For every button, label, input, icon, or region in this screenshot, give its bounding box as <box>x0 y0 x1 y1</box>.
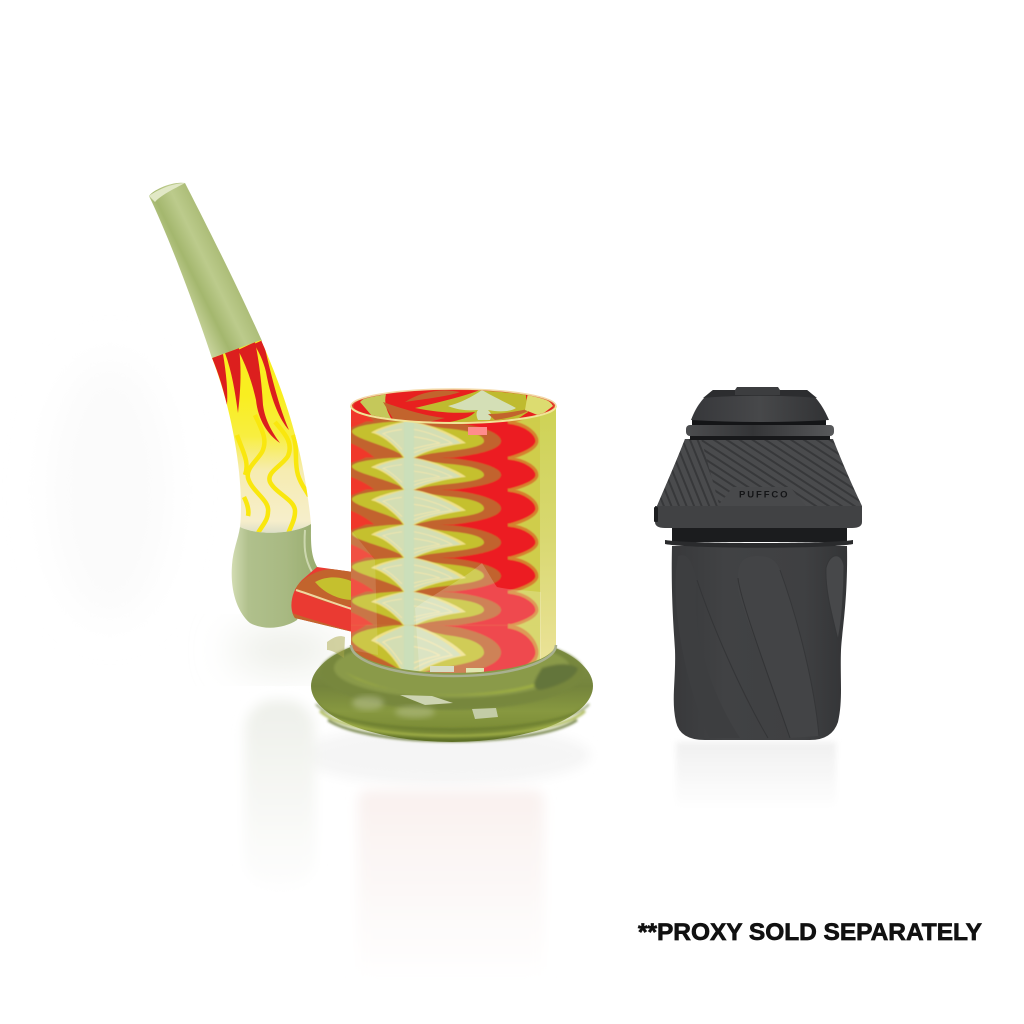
yellow flame waves <box>237 415 309 534</box>
bottom glass edge of cup <box>351 645 556 676</box>
wig-wag cup <box>345 385 560 685</box>
mouthpiece: flame section <box>212 340 311 533</box>
wig-wag pattern <box>351 408 556 673</box>
pink sheen on lower cup <box>415 563 541 680</box>
proxy silicone body <box>672 546 847 740</box>
reflection: glass piece and proxy <box>245 700 836 985</box>
red flame tongues <box>212 340 289 443</box>
proxy top rings <box>686 419 834 440</box>
proxy ribbed cone <box>650 435 865 528</box>
glass base disc <box>311 630 593 742</box>
mouthpiece: green tip section <box>149 183 262 358</box>
caption: proxy sold separately: **PROXY SOLD SEPARATELY <box>638 919 982 946</box>
puffco wordmark: PUFFCO <box>739 490 789 500</box>
product scene <box>149 182 982 940</box>
pale right strip <box>540 409 556 659</box>
proxy device <box>650 387 865 740</box>
proxy neck and lip <box>665 527 853 548</box>
connector tube <box>291 567 351 632</box>
cup interior rim <box>350 388 560 424</box>
red highlight <box>468 427 487 435</box>
proxy cap <box>691 387 829 422</box>
mouthpiece: green lower bulb <box>232 524 318 628</box>
